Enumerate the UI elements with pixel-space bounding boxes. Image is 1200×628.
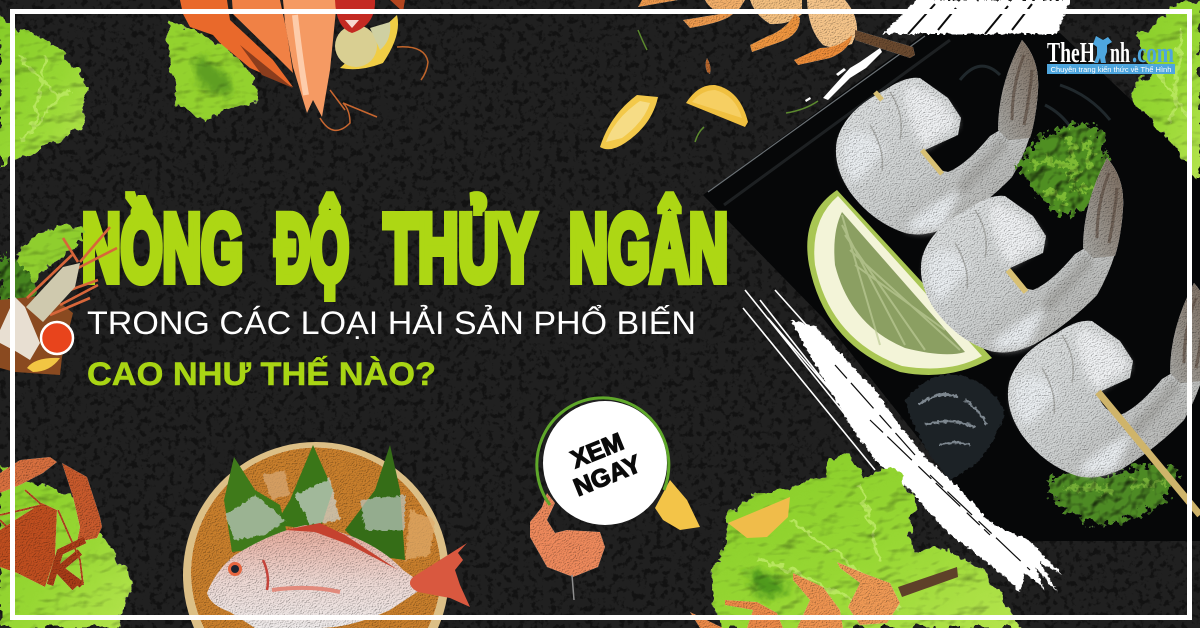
prawn bodies xyxy=(180,0,293,87)
title: ĐỘ xyxy=(275,196,349,302)
lobster plate xyxy=(0,225,117,375)
crab xyxy=(0,457,102,588)
cooked shrimp skewer top xyxy=(638,0,915,74)
logo wordmark: TheH xyxy=(1047,37,1095,69)
claw left xyxy=(0,457,57,493)
dark parsley left xyxy=(0,257,35,303)
lettuce under prawns xyxy=(168,22,258,122)
icon: sauce bowl xyxy=(41,322,73,354)
icon: lime slice xyxy=(807,190,992,375)
lettuce behind lobster xyxy=(15,225,83,297)
lettuce xyxy=(712,450,1020,628)
title: NỒNG xyxy=(82,196,243,302)
arm and legs xyxy=(50,540,85,588)
logo wordmark: nh xyxy=(1110,37,1130,69)
green brush ring xyxy=(537,398,669,505)
ngay: NGAY xyxy=(570,450,645,502)
xem: XEM xyxy=(567,428,628,474)
claw right xyxy=(62,463,102,542)
title: THỦY xyxy=(384,196,536,302)
cooked prawns top xyxy=(168,0,428,130)
title: NGÂN xyxy=(569,194,728,302)
icon: parsley under shrimp xyxy=(1048,466,1178,524)
ice xyxy=(225,470,435,560)
shrimp below button xyxy=(530,493,605,600)
lettuce bottom left xyxy=(0,463,133,628)
dorsal fin xyxy=(285,523,398,570)
logo tagline xyxy=(1047,64,1175,74)
icon: parsley xyxy=(1018,124,1107,215)
logo wordmark xyxy=(1047,37,1174,69)
lettuce top left xyxy=(0,15,89,168)
lobster body xyxy=(26,263,80,322)
lettuce bottom right with shrimp xyxy=(690,450,1020,628)
panel: black tray xyxy=(703,33,1200,541)
lemon wedge on plate xyxy=(27,358,60,372)
question line: CAO NHƯ THẾ NÀO? xyxy=(87,356,436,392)
white prawn pieces xyxy=(0,297,40,360)
skewer stick xyxy=(898,567,958,597)
button: xem ngay xyxy=(537,398,669,525)
fish tail xyxy=(410,543,470,607)
white brush stroke upper xyxy=(805,0,1070,102)
skewer 3 xyxy=(1098,392,1200,515)
body xyxy=(0,503,57,587)
basket weave xyxy=(191,447,441,628)
white circle xyxy=(543,401,667,525)
cooked shrimp xyxy=(690,562,900,628)
lemon wedge below button xyxy=(655,480,700,530)
tomato xyxy=(335,0,375,33)
icon: ice on tray xyxy=(905,374,1005,480)
raw shrimp 3 xyxy=(1008,283,1200,477)
fish basket xyxy=(183,442,470,628)
skewer 2 xyxy=(1008,270,1026,292)
icon: herb sprigs xyxy=(638,30,818,142)
white brush stroke lower xyxy=(743,290,1062,593)
lobster legs xyxy=(27,227,117,315)
leaves xyxy=(224,457,290,552)
wooden plate xyxy=(0,295,73,375)
basket rim xyxy=(183,442,449,628)
logo xyxy=(1047,36,1175,74)
eye xyxy=(228,562,242,576)
lemon slice xyxy=(728,497,790,538)
title xyxy=(82,194,728,302)
raw shrimp 2 xyxy=(921,158,1123,352)
gill xyxy=(263,560,268,590)
icon: bodybuilder xyxy=(1093,36,1112,63)
lemon wedge top left xyxy=(600,95,658,149)
lettuce top right xyxy=(1128,0,1200,182)
lemon slices xyxy=(340,15,398,69)
fish body xyxy=(207,525,420,628)
logo: Chuyên trang kiến thức về Thể Hình xyxy=(1051,65,1171,74)
subtitle: TRONG CÁC LOẠI HẢI SẢN PHỔ BIẾN xyxy=(87,305,696,341)
logo wordmark: .com xyxy=(1132,37,1174,69)
raw shrimp 1 xyxy=(836,40,1038,234)
skewer 1 xyxy=(875,92,942,174)
lemon wedge top right xyxy=(686,85,748,127)
